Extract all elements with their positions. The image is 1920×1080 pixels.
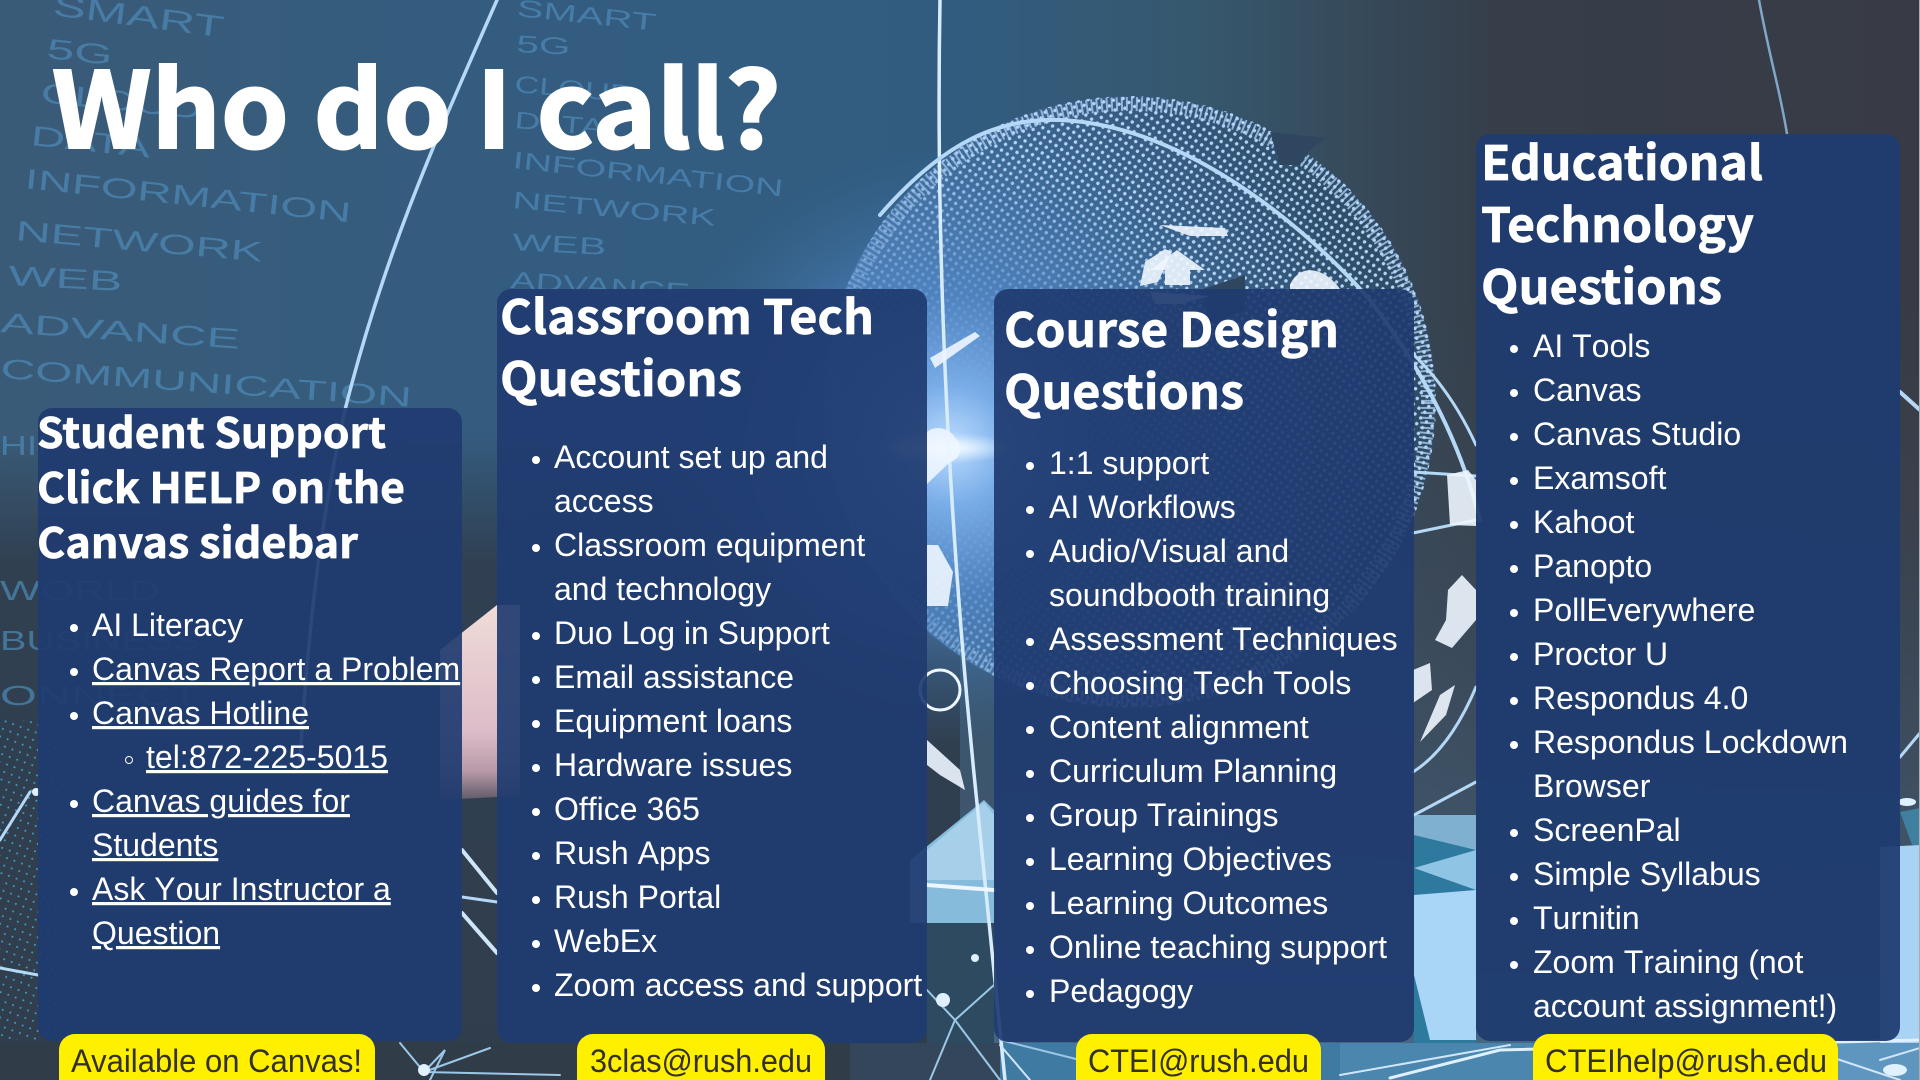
list: course design items — [1026, 445, 1398, 1009]
panel: course design — [994, 289, 1414, 1042]
background words column one: NETWORK — [14, 215, 265, 268]
background words column one: WORLD — [0, 575, 160, 606]
list: student support items: tel:872-225-5015 — [146, 739, 388, 775]
heading: educational technology — [1481, 125, 1763, 318]
contact pill: course design: CTEI@rush.edu — [1088, 1043, 1309, 1079]
list: educational technology items: Examsoft — [1533, 460, 1666, 496]
list: educational technology items: Kahoot — [1533, 504, 1635, 540]
background words column one: ONNECT — [0, 680, 200, 711]
background words column one: CLOUD — [39, 77, 204, 125]
list: classroom tech items: Email assistance — [554, 659, 794, 695]
background words column two: ADVANCE — [510, 267, 691, 307]
background words column one: COMMUNICATION — [0, 353, 413, 413]
heading: student support: Student Support — [37, 400, 386, 461]
list: classroom tech items: and technology — [554, 571, 771, 607]
list: educational technology items: Simple Syllabus — [1533, 856, 1761, 892]
light flare — [650, 145, 1250, 745]
background words column one: DATA — [29, 120, 152, 164]
background words column two: INFORMATION — [511, 147, 785, 202]
list: course design items: 1:1 support — [1049, 445, 1209, 481]
list: course design items: Group Trainings — [1049, 797, 1278, 833]
list: course design items: Online teaching support — [1049, 929, 1387, 965]
panel: classroom tech — [497, 279, 927, 1043]
icon: dollar coin outline — [920, 670, 960, 710]
icons on the globe — [927, 225, 1476, 790]
list: course design items: Choosing Tech Tools — [1049, 665, 1351, 701]
list: classroom tech items: access — [554, 483, 654, 519]
list: student support items: Ask Your Instructor a — [92, 871, 391, 907]
list: classroom tech items: Office 365 — [554, 791, 700, 827]
list: educational technology items: Proctor U — [1533, 636, 1668, 672]
list: classroom tech items: Account set up and — [554, 439, 828, 475]
list: educational technology items: Zoom Training (not — [1533, 944, 1803, 980]
list: classroom tech items: WebEx — [554, 923, 657, 959]
list: educational technology items: Respondus Lockdown — [1533, 724, 1848, 760]
list: classroom tech items: Classroom equipment — [554, 527, 865, 563]
list: educational technology items: ScreenPal — [1533, 812, 1681, 848]
list: course design items: Curriculum Planning — [1049, 753, 1337, 789]
globe of dots — [824, 96, 1436, 708]
background words column one: ADVANCE — [0, 307, 241, 355]
list: student support items: Canvas Report a Problem — [92, 651, 460, 687]
list: educational technology items: Panopto — [1533, 548, 1652, 584]
background words column one: 5G — [45, 33, 114, 71]
list: educational technology items: Turnitin — [1533, 900, 1640, 936]
hand in background — [440, 605, 520, 800]
list: classroom tech items: Hardware issues — [554, 747, 792, 783]
list: classroom tech items: Rush Apps — [554, 835, 711, 871]
heading: student support — [37, 400, 405, 571]
background words column two — [510, 0, 785, 307]
list: student support items: Canvas guides for — [92, 783, 350, 819]
list: classroom tech items: Duo Log in Support — [554, 615, 830, 651]
background words column one: INFORMATION — [23, 163, 353, 228]
contact pill: educational technology: CTEIhelp@rush.edu — [1545, 1043, 1827, 1079]
list: course design items: Learning Objectives — [1049, 841, 1332, 877]
background words column two: CLOUD — [513, 71, 635, 108]
list: course design items: Learning Outcomes — [1049, 885, 1328, 921]
heading: student support: Click HELP on the — [37, 455, 405, 516]
list: classroom tech items — [532, 439, 922, 1003]
list: course design items: Assessment Techniques — [1049, 621, 1398, 657]
heading: classroom tech: Classroom Tech — [500, 279, 874, 348]
list: educational technology items: account assignment!) — [1533, 988, 1837, 1024]
contact pill: classroom tech: 3clas@rush.edu — [590, 1043, 812, 1079]
edge line — [1919, 0, 1920, 1080]
heading: student support: Canvas sidebar — [37, 510, 359, 571]
list: student support items: Canvas Hotline — [92, 695, 309, 731]
list: course design items: soundbooth training — [1049, 577, 1330, 613]
background words column one: WEB — [8, 260, 123, 297]
list: educational technology items: PollEverywhere — [1533, 592, 1755, 628]
background words column one: HIF — [0, 430, 60, 461]
list: classroom tech items: Equipment loans — [554, 703, 792, 739]
list: student support items: Students — [92, 827, 218, 863]
panel background — [38, 408, 462, 1041]
list: student support items: AI Literacy — [92, 607, 243, 643]
list: educational technology items — [1510, 328, 1848, 1024]
panel background — [1476, 134, 1900, 1041]
list: course design items: Pedagogy — [1049, 973, 1193, 1009]
list: student support items — [70, 607, 460, 951]
heading: classroom tech: Questions — [500, 341, 742, 410]
contact pill: student support: Available on Canvas! — [71, 1043, 362, 1079]
list: classroom tech items: Rush Portal — [554, 879, 721, 915]
list: educational technology items: Respondus 4.0 — [1533, 680, 1748, 716]
panel background — [497, 289, 927, 1043]
background words column two: 5G — [516, 31, 571, 61]
heading: course design: Course Design — [1004, 292, 1339, 361]
title: Who do I call? — [52, 27, 781, 179]
panel: student support — [37, 400, 462, 1041]
flare streak — [875, 432, 1015, 464]
list: educational technology items: Canvas — [1533, 372, 1642, 408]
background words column one — [0, 0, 413, 711]
heading: course design — [1004, 292, 1339, 423]
heading: educational technology: Questions — [1481, 249, 1722, 318]
background words column two: WEB — [512, 229, 607, 261]
list: student support items: Question — [92, 915, 220, 951]
heading: educational technology: Technology — [1481, 187, 1754, 256]
background words column one: BUSINESS — [0, 625, 200, 656]
background words column two: NETWORK — [511, 187, 717, 232]
light polygons lower area — [0, 800, 1920, 1080]
list: course design items: Content alignment — [1049, 709, 1309, 745]
list: educational technology items: Browser — [1533, 768, 1651, 804]
background words column two: DATA — [513, 107, 605, 142]
panel background — [994, 289, 1414, 1042]
heading: course design: Questions — [1004, 354, 1244, 423]
heading: classroom tech — [500, 279, 874, 410]
panel: educational technology — [1476, 125, 1900, 1041]
list: classroom tech items: Zoom access and support — [554, 967, 922, 1003]
list: course design items: AI Workflows — [1049, 489, 1236, 525]
list: course design items: Audio/Visual and — [1049, 533, 1289, 569]
list: educational technology items: Canvas Studio — [1533, 416, 1741, 452]
list: educational technology items: AI Tools — [1533, 328, 1650, 364]
heading: educational technology: Educational — [1481, 125, 1763, 194]
